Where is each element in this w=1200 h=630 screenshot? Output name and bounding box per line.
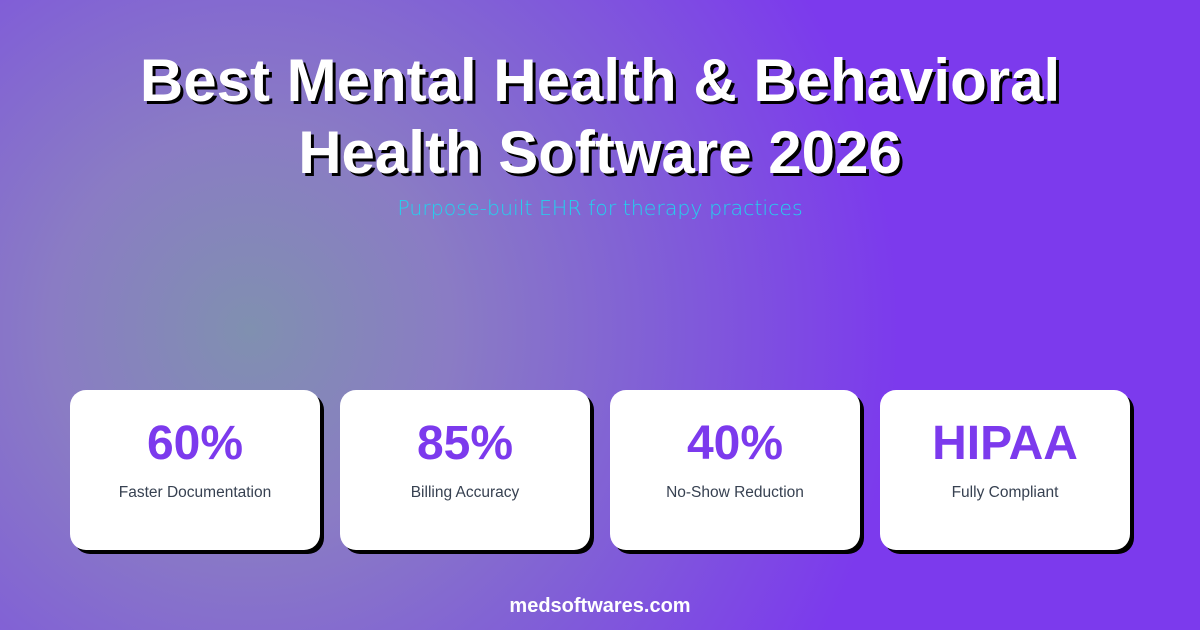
subtitle: Purpose-built EHR for therapy practices [397,196,803,220]
card: no-show: 40% [687,417,783,470]
card: documentation [70,390,320,550]
footer: medsoftwares.com [509,595,691,617]
card: documentation: Faster Documentation [119,484,271,501]
card: billing: Billing Accuracy [411,484,519,501]
title: Health Software 2026 [298,119,902,186]
card: billing: 85% [417,417,513,470]
card: hipaa: Fully Compliant [952,484,1058,501]
title [140,47,1060,186]
card: billing [340,390,590,550]
card: no-show [610,390,860,550]
title: Best Mental Health & Behavioral [140,47,1060,114]
card: hipaa: HIPAA [932,417,1078,470]
card: no-show: No-Show Reduction [666,484,804,501]
card: documentation: 60% [147,417,243,470]
card: hipaa [880,390,1130,550]
